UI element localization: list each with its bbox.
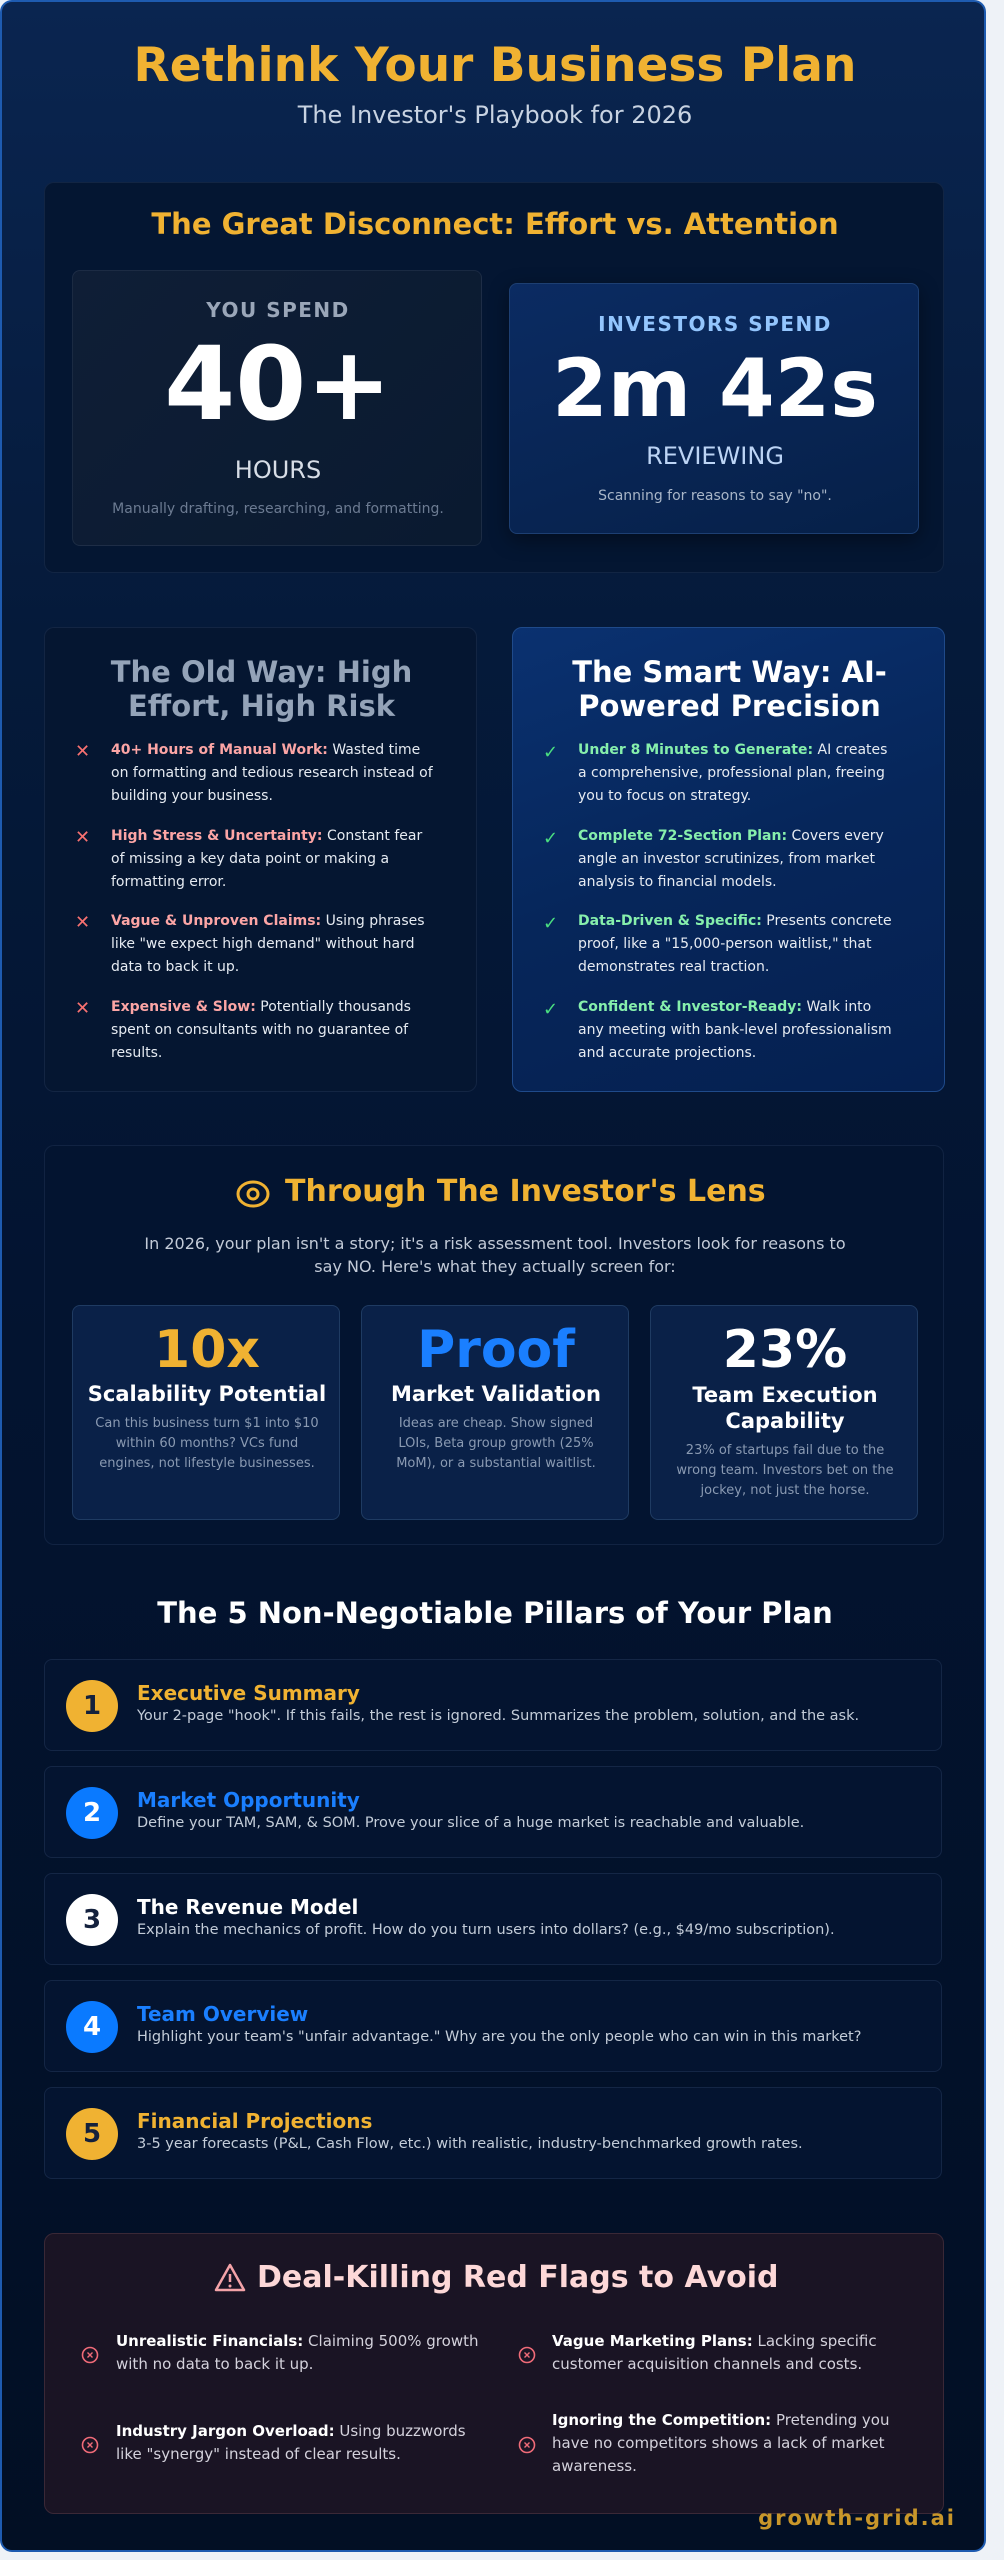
icon: x circle — [82, 2346, 98, 2364]
label: investors spend: INVESTORS SPEND — [598, 312, 832, 336]
icon: x circle — [518, 2346, 536, 2364]
flag: unrealistic financials: Unrealistic Financials: Claiming 500% growth — [116, 2332, 478, 2350]
item: manual work: 40+ Hours of Manual Work: Wasted time — [111, 742, 420, 758]
flag: vague marketing — [518, 2332, 877, 2373]
icon: warning — [214, 2264, 246, 2292]
flag: competition — [518, 2411, 889, 2475]
flag: jargon: Industry Jargon Overload: Using buzzwords — [116, 2422, 466, 2440]
card: you spend — [72, 270, 482, 546]
card: 23%: Capability — [725, 1409, 845, 1433]
icon: check: ✓ — [543, 999, 558, 1020]
icon: check: ✓ — [543, 828, 558, 849]
item: expensive — [75, 998, 411, 1061]
badge 5: 5 — [83, 2119, 101, 2149]
pillar 4 — [44, 1980, 942, 2072]
icon: x: ✕ — [75, 741, 90, 762]
item: data-driven — [543, 913, 892, 975]
item: confident: and accurate projections. — [578, 1045, 756, 1061]
card: proof: LOIs, Beta group growth (25% — [398, 1436, 594, 1451]
icon: x: ✕ — [75, 912, 90, 933]
icon: x circle — [82, 2436, 98, 2454]
card: 10x — [72, 1305, 340, 1520]
card: 10x: engines, not lifestyle businesses. — [99, 1456, 315, 1471]
badge 1 — [66, 1680, 118, 1732]
panel: red flags — [44, 2233, 944, 2514]
stat: 2m 42s: 2m 42s — [552, 342, 878, 435]
icon: x: ✕ — [75, 827, 90, 848]
intro text: In 2026, your plan isn't a story; it's a risk assessment tool. Investors look for reasons to — [144, 1234, 846, 1253]
heading: pillars: The 5 Non-Negotiable Pillars of Your Plan — [157, 1596, 833, 1630]
heading: old way — [110, 655, 412, 723]
intro text: say NO. Here's what they actually screen for: — [314, 1257, 676, 1276]
item: vague claims — [75, 912, 425, 975]
flag: competition: awareness. — [552, 2457, 637, 2475]
badge 5 — [66, 2108, 118, 2160]
pillar 3 — [44, 1873, 942, 1965]
card: 10x: Scalability Potential — [88, 1382, 326, 1406]
caption: investors: Scanning for reasons to say "no". — [598, 488, 832, 504]
flag: unrealistic financials — [82, 2332, 478, 2373]
pillar 1: Executive Summary — [137, 1681, 360, 1705]
heading: great disconnect: The Great Disconnect: Effort vs. Attention — [151, 207, 839, 241]
badge 2: 2 — [83, 1798, 101, 1828]
card: proof: Market Validation — [391, 1382, 601, 1406]
item: data-driven: Data-Driven & Specific: Presents concrete — [578, 913, 892, 929]
icon: eye — [236, 1180, 270, 1208]
card: proof: Proof — [417, 1320, 575, 1380]
icon: x circle — [518, 2436, 536, 2454]
caption: you spend: Manually drafting, researching, and formatting. — [112, 501, 444, 517]
card: 23%: Team Execution — [692, 1383, 878, 1407]
card: 10x: within 60 months? VCs fund — [116, 1436, 298, 1451]
icon: x: ✕ — [75, 998, 90, 1019]
badge 4: 4 — [83, 2012, 101, 2042]
card: 23%: wrong team. Investors bet on the — [676, 1463, 894, 1478]
pillar 4: Team Overview — [137, 2002, 308, 2026]
stat: 40+: 40+ — [164, 325, 392, 444]
item: 72-section: Complete 72-Section Plan: Covers every — [578, 828, 884, 844]
item: data-driven: proof, like a "15,000-person waitlist," that — [578, 936, 871, 952]
item: under 8 minutes: a comprehensive, professional plan, freeing — [578, 765, 885, 781]
card: proof — [361, 1305, 629, 1520]
heading: red flags: Deal-Killing Red Flags to Avoid — [257, 2260, 779, 2295]
item: data-driven: demonstrates real traction. — [578, 959, 769, 975]
item: vague claims: data to back it up. — [111, 959, 239, 975]
pillar 1: Your 2-page "hook". If this fails, the rest is ignored. Summarizes the problem, solution, and the ask. — [137, 1708, 859, 1724]
flag: vague marketing: customer acquisition channels and costs. — [552, 2355, 862, 2373]
item: expensive: spent on consultants with no guarantee of — [111, 1022, 408, 1038]
item: manual work: building your business. — [111, 788, 273, 804]
panel: investor's lens — [44, 1145, 944, 1545]
heading: old way: Effort, High Risk — [128, 689, 395, 723]
heading: smart way: Powered Precision — [578, 689, 881, 723]
item: stress: formatting error. — [111, 874, 226, 890]
item: vague claims: Vague & Unproven Claims: Using phrases — [111, 913, 425, 929]
badge 4 — [66, 2001, 118, 2053]
item: stress — [75, 827, 422, 890]
flag: jargon: like "synergy" instead of clear results. — [116, 2445, 401, 2463]
pillar 2 — [44, 1766, 942, 1858]
item: vague claims: like "we expect high demand" without hard — [111, 936, 414, 952]
item: stress: of missing a key data point or making a — [111, 851, 389, 867]
icon: check: ✓ — [543, 742, 558, 763]
card: 23%: 23% of startups fail due to the — [686, 1443, 884, 1458]
pillar 3: Explain the mechanics of profit. How do you turn users into dollars? (e.g., $49/mo subscription). — [137, 1922, 835, 1938]
card: investors spend — [509, 283, 919, 534]
footer brand: growth-grid.ai — [758, 2506, 956, 2530]
item: stress: High Stress & Uncertainty: Constant fear — [111, 828, 422, 844]
pillar 5 — [44, 2087, 942, 2179]
pillar 2: Define your TAM, SAM, & SOM. Prove your slice of a huge market is reachable and valuable. — [137, 1815, 804, 1831]
item: manual work — [75, 741, 433, 804]
card: 10x: 10x — [154, 1320, 260, 1380]
label: you spend: YOU SPEND — [206, 298, 350, 322]
item: confident — [543, 999, 892, 1061]
flag: competition: have no competitors shows a lack of market — [552, 2434, 884, 2452]
item: under 8 minutes: you to focus on strategy. — [578, 788, 751, 804]
subtitle: The Investor's Playbook for 2026 — [298, 101, 692, 129]
item: confident: Confident & Investor-Ready: Walk into — [578, 999, 871, 1015]
flag: competition: Ignoring the Competition: Pretending you — [552, 2411, 889, 2429]
item: expensive: Expensive & Slow: Potentially thousands — [111, 999, 411, 1015]
item: expensive: results. — [111, 1045, 162, 1061]
pillar 5: Financial Projections — [137, 2109, 372, 2133]
intro text — [144, 1234, 846, 1276]
badge 3: 3 — [83, 1905, 101, 1935]
card: proof: Ideas are cheap. Show signed — [399, 1416, 593, 1431]
pillar 2: Market Opportunity — [137, 1788, 360, 1812]
card: 10x: Can this business turn $1 into $10 — [95, 1416, 319, 1431]
pillar 4: Highlight your team's "unfair advantage." Why are you the only people who can win in this market? — [137, 2029, 861, 2045]
heading: investor's lens: Through The Investor's Lens — [285, 1174, 766, 1209]
title: Rethink Your Business Plan — [134, 38, 856, 93]
heading: smart way — [572, 655, 887, 723]
item: 72-section — [543, 828, 884, 890]
heading: old way: The Old Way: High — [111, 655, 412, 689]
card: 23% — [650, 1305, 918, 1520]
panel: great disconnect — [44, 182, 944, 573]
item: under 8 minutes: Under 8 Minutes to Generate: AI creates — [578, 742, 887, 758]
panel: old way — [44, 627, 477, 1092]
card: 23%: 23% — [723, 1320, 847, 1380]
item: confident: any meeting with bank-level professionalism — [578, 1022, 892, 1038]
flag: unrealistic financials: with no data to back it up. — [116, 2355, 313, 2373]
pillar 5: 3-5 year forecasts (P&L, Cash Flow, etc.) with realistic, industry-benchmarked growth rates. — [137, 2136, 803, 2152]
icon: check: ✓ — [543, 913, 558, 934]
pillar 3: The Revenue Model — [137, 1895, 358, 1919]
card: 23%: jockey, not just the horse. — [701, 1483, 869, 1498]
panel: smart way — [512, 627, 945, 1092]
unit: hours: HOURS — [235, 456, 321, 484]
badge 3 — [66, 1894, 118, 1946]
item: manual work: on formatting and tedious research instead of — [111, 765, 433, 781]
pillar 1 — [44, 1659, 942, 1751]
flag: vague marketing: Vague Marketing Plans: Lacking specific — [552, 2332, 877, 2350]
card: proof: MoM), or a substantial waitlist. — [396, 1456, 596, 1471]
item: under 8 minutes — [543, 742, 887, 804]
flag: jargon — [82, 2422, 466, 2463]
unit: reviewing: REVIEWING — [646, 442, 784, 470]
item: 72-section: angle an investor scrutinizes, from market — [578, 851, 875, 867]
heading: smart way: The Smart Way: AI- — [572, 655, 887, 689]
badge 2 — [66, 1787, 118, 1839]
item: 72-section: analysis to financial models. — [578, 874, 777, 890]
badge 1: 1 — [83, 1691, 101, 1721]
